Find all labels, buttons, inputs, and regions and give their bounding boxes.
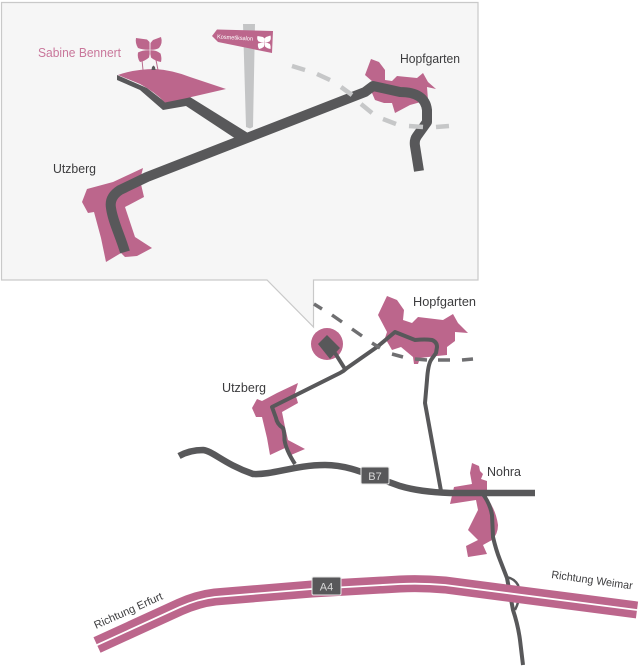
road: B7 [179, 450, 535, 493]
town: Nohra shape [450, 463, 498, 557]
label: Richtung Weimar: Richtung Weimar [551, 569, 634, 592]
label: Richtung Erfurt: Richtung Erfurt [92, 591, 165, 632]
town: Utzberg detail shape [82, 168, 152, 262]
signpost pole [243, 24, 255, 128]
road: side road to salon [117, 75, 248, 139]
signpost board [212, 30, 273, 53]
detail map [38, 24, 460, 262]
dashed railway [314, 304, 473, 360]
label: Utzberg: Utzberg [222, 381, 266, 395]
badge: A4 [312, 577, 341, 595]
local roads [272, 332, 523, 665]
label: Sabine Bennert: Sabine Bennert [38, 45, 121, 60]
town: Sabine Bennert site [118, 69, 226, 102]
label: Hopfgarten detail: Hopfgarten [400, 52, 460, 66]
label: Hopfgarten: Hopfgarten [413, 295, 476, 309]
icon: butterfly logo [136, 37, 162, 70]
town: Hopfgarten detail shape [365, 59, 436, 113]
label: Utzberg detail: Utzberg [53, 162, 96, 176]
label: Nohra: Nohra [487, 465, 521, 479]
badge: A4: A4 [320, 582, 333, 594]
badge: B7 [361, 467, 389, 484]
town: Utzberg shape [252, 383, 305, 455]
icon: sign butterfly [257, 36, 271, 49]
sign text: Kosmetiksalon: Kosmetiksalon [217, 35, 253, 43]
panel: callout detail [2, 2, 478, 327]
dashed railway detail [292, 66, 449, 127]
town: Hopfgarten shape [378, 296, 468, 364]
badge: B7: B7 [368, 471, 382, 483]
road: main detail road [111, 86, 427, 252]
road: A4 motorway [92, 584, 640, 647]
location marker [311, 328, 343, 360]
